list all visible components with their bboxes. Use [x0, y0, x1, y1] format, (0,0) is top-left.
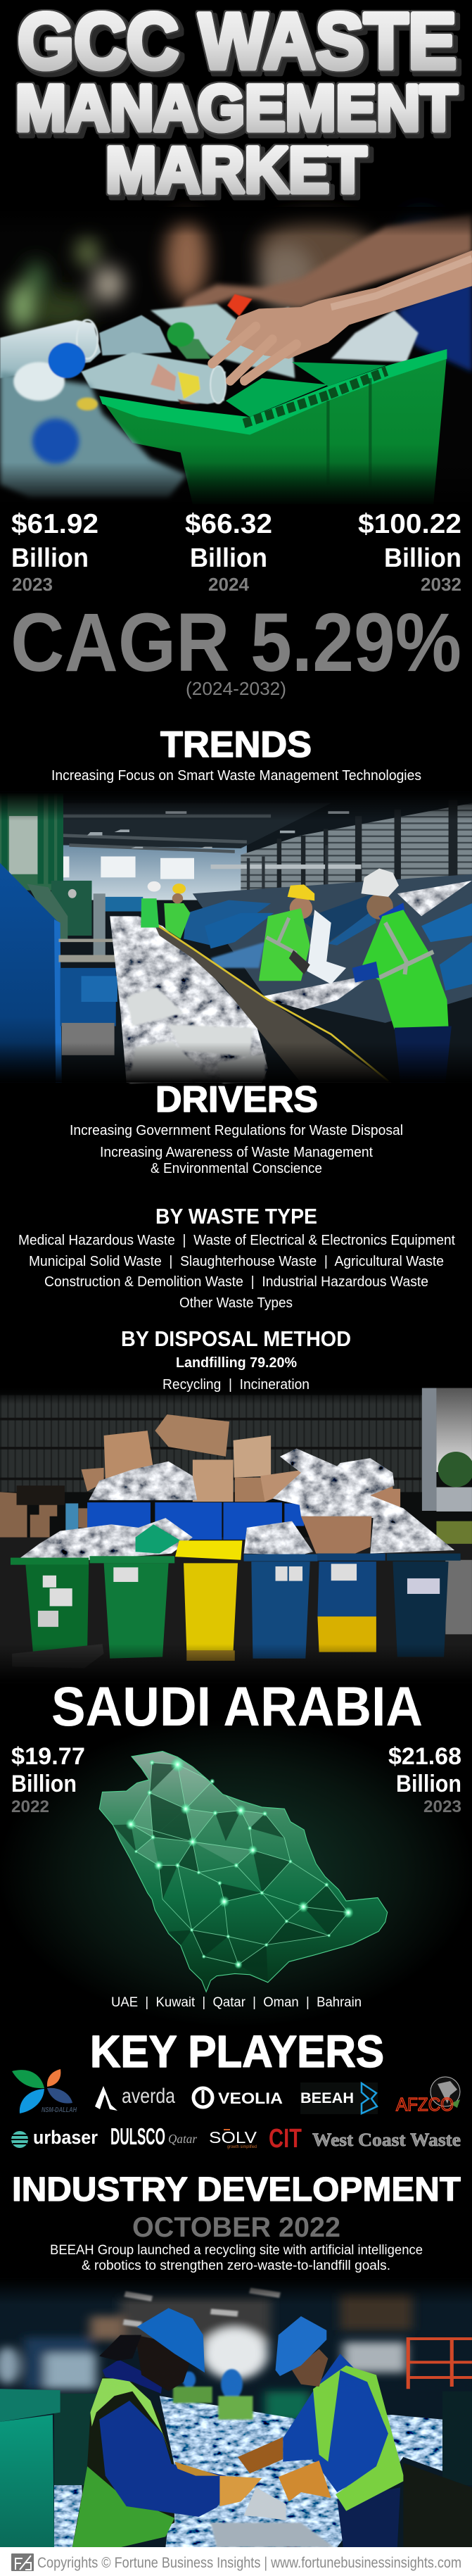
green bin	[0, 2389, 96, 2547]
disposal method list: Recycling | Incineration	[162, 1377, 310, 1393]
logo: BEEAH: BEEAH	[300, 2090, 354, 2106]
logo: AFZCO: AFZCO	[396, 2094, 454, 2115]
plastic bottles	[0, 294, 253, 498]
logo: CIT: CIT	[269, 2124, 302, 2154]
trends text: Increasing Focus on Smart Waste Management Technologies	[51, 768, 421, 784]
heading: by disposal method: BY DISPOSAL METHOD	[121, 1326, 351, 1351]
plastic waste heap	[54, 2396, 442, 2547]
stat 2032: Billion	[384, 544, 461, 573]
worker left	[72, 2308, 262, 2547]
map background glow	[0, 1718, 472, 2028]
hand	[212, 251, 472, 381]
heading: by waste type: BY WASTE TYPE	[155, 1204, 317, 1229]
green crate	[99, 349, 447, 504]
stat 2024: $66.32	[185, 509, 272, 539]
waste type list: Municipal Solid Waste | Slaughterhouse Waste | Agricultural Waste	[29, 1254, 444, 1269]
stat Saudi 2023: Billion	[396, 1771, 461, 1797]
logo: AFZCO	[396, 2077, 460, 2115]
footer bar	[0, 2547, 472, 2576]
photo: workers sorting plastic waste	[0, 2279, 472, 2547]
stat Saudi 2022: $19.77	[11, 1743, 85, 1770]
heading: key players: KEY PLAYERS	[90, 2026, 384, 2077]
stat Saudi 2022	[11, 1743, 85, 1816]
stat 2023: $61.92	[11, 509, 98, 539]
drivers text: Increasing Awareness of Waste Management	[100, 1145, 373, 1160]
logo: NSM-Dallah	[12, 2069, 77, 2114]
stat Saudi 2023: 2023	[423, 1797, 461, 1816]
stat Saudi 2022: 2022	[11, 1797, 49, 1816]
drivers text: Increasing Government Regulations for Waste Disposal	[70, 1123, 403, 1138]
waste type list: Medical Hazardous Waste | Waste of Electrical & Electronics Equipment	[18, 1233, 455, 1248]
cardboard boxes	[82, 1414, 400, 1507]
logo: Dulsco Qatar: Qatar	[168, 2132, 198, 2146]
workers	[141, 868, 452, 1083]
worker right	[238, 2316, 405, 2547]
waste type list: Other Waste Types	[179, 1295, 293, 1311]
heading: trends: TRENDS	[160, 724, 312, 765]
logo: West Coast Waste: West Coast Waste	[312, 2130, 461, 2150]
map: Saudi Arabia network	[90, 1747, 391, 1997]
heading: industry development: INDUSTRY DEVELOPMENT	[12, 2171, 461, 2209]
drivers text: & Environmental Conscience	[151, 1161, 322, 1176]
stat 2032: 2032	[421, 574, 461, 595]
stat 2032: $100.22	[358, 509, 461, 539]
stat 2024: Billion	[190, 544, 267, 573]
logo: SOLV: SOLV	[209, 2128, 257, 2147]
logo: Veolia: VEOLIA	[218, 2090, 283, 2107]
icon: Fortune Business Insights logo	[11, 2553, 34, 2571]
photo: recycling conveyor workers	[0, 792, 472, 1083]
stat Saudi 2022: Billion	[11, 1771, 77, 1797]
logo: averda: averda	[122, 2085, 175, 2108]
heading: Saudi Arabia: SAUDI ARABIA	[51, 1675, 423, 1738]
background workers	[173, 2369, 253, 2420]
photo: overflowing waste bins	[0, 1388, 472, 1683]
drivers text	[70, 1123, 403, 1176]
disposal method list	[162, 1355, 310, 1393]
back blue bins	[87, 1502, 304, 1540]
development text	[50, 2243, 423, 2273]
stat 2023: Billion	[11, 544, 89, 573]
logo: SOLV: growth simplified	[227, 2145, 257, 2149]
stat 2024: 2024	[208, 574, 250, 595]
logo: Dulsco Qatar: DULSCO	[110, 2123, 165, 2149]
heading: drivers: DRIVERS	[155, 1079, 318, 1120]
front bins	[11, 1540, 461, 1669]
CAGR period: (2024-2032)	[186, 678, 286, 699]
development text: BEEAH Group launched a recycling site with artificial intelligence	[50, 2243, 423, 2258]
stat 2024	[185, 509, 272, 595]
stat Saudi 2023: $21.68	[388, 1743, 461, 1770]
stat 2023: 2023	[12, 574, 53, 595]
logo: urbaser: urbaser	[33, 2127, 98, 2148]
waste type list: Construction & Demolition Waste | Industrial Hazardous Waste	[44, 1274, 428, 1290]
development text: & robotics to strengthen zero-waste-to-landfill goals.	[82, 2258, 390, 2273]
disposal method list: Landfilling 79.20%	[176, 1355, 297, 1371]
trash heaps	[110, 910, 374, 1083]
other GCC countries: UAE | Kuwait | Qatar | Oman | Bahrain	[111, 1995, 362, 2010]
waste bags	[20, 1448, 454, 1560]
stat 2032	[358, 509, 461, 595]
logo: averda	[95, 2085, 175, 2111]
title	[15, 0, 457, 206]
logo: NSM-Dallah: NSM-DALLAH	[42, 2106, 77, 2114]
stat Saudi 2023	[388, 1743, 461, 1816]
logo: BEEAH	[300, 2082, 378, 2114]
stat 2023	[11, 509, 98, 595]
photo: hand sorting plastic bottles into green crate	[0, 207, 472, 508]
logo: Veolia	[193, 2088, 283, 2107]
waste type list	[18, 1233, 455, 1311]
date: OCTOBER 2022	[132, 2212, 340, 2243]
title: MARKET	[106, 134, 366, 206]
